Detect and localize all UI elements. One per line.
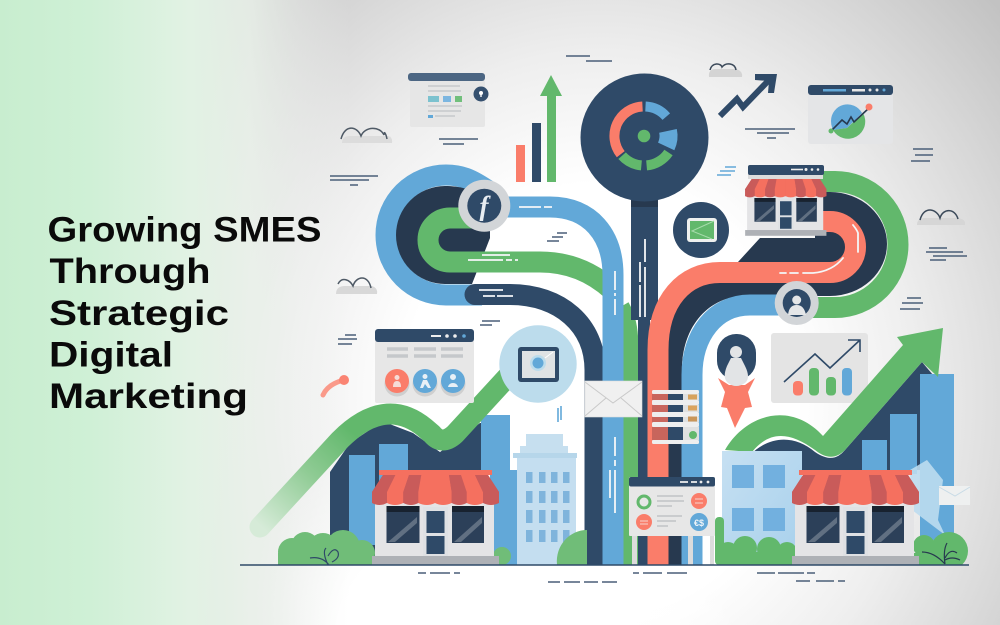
branch doodle right (922, 543, 960, 564)
right building silhouette (750, 362, 950, 470)
right road: blue branch (692, 305, 790, 565)
right road: navy core (665, 192, 887, 565)
right trend arrow (725, 328, 943, 457)
trunk (631, 195, 658, 320)
store top right (745, 175, 826, 236)
title: Through (50, 251, 210, 291)
right road: green ring (800, 182, 898, 308)
storefront bottom right (792, 470, 919, 565)
camera badge (499, 325, 577, 403)
left road swirl: blue ring (386, 175, 490, 295)
left bars (349, 415, 518, 565)
user badge circle (775, 281, 819, 325)
bushes right (715, 517, 968, 564)
arrow zigzag top (720, 80, 769, 116)
decorative dash notes (330, 56, 967, 582)
storefront bottom left (372, 470, 499, 565)
title: Digital (49, 335, 173, 375)
f badge circle (458, 180, 510, 232)
left road swirl: navy core (396, 186, 490, 284)
small coral arrow (323, 375, 349, 395)
billboard: €$ (694, 518, 704, 528)
envelope badge circle (673, 202, 729, 258)
title: Strategic (49, 293, 229, 333)
trunk lower (638, 318, 650, 565)
web widget left (375, 329, 474, 403)
office building (722, 451, 802, 565)
left trend curve (260, 372, 512, 527)
growth bars and up arrow (516, 75, 562, 182)
line and bar chart card (771, 333, 868, 403)
store top header bar (748, 165, 824, 179)
left road: navy branch (464, 284, 595, 565)
browser widget top left (408, 73, 488, 127)
left road: green branch (428, 218, 612, 290)
road lane markings (468, 207, 858, 513)
city tower (513, 434, 577, 565)
clouds (336, 64, 965, 294)
left road: blue branch (505, 207, 613, 565)
f badge circle: f (480, 191, 492, 221)
donut badge circle (580, 74, 708, 202)
ground line (240, 564, 969, 566)
light paper plane and envelope (910, 460, 970, 535)
title: Marketing (49, 376, 248, 416)
right bars (862, 374, 954, 540)
bushes left (278, 530, 587, 566)
left road: green descent (622, 306, 631, 565)
envelope center (585, 381, 642, 417)
title: Growing SMES (48, 210, 322, 250)
browser widget top right (808, 85, 893, 144)
right road: coral branch (658, 222, 856, 565)
person rocket icon (717, 334, 756, 428)
branch doodle left (310, 548, 338, 565)
arrow head zigzag top (755, 74, 777, 93)
billboard (629, 477, 715, 565)
list widget (652, 390, 699, 444)
title (48, 210, 322, 416)
left building silhouette (330, 423, 481, 565)
